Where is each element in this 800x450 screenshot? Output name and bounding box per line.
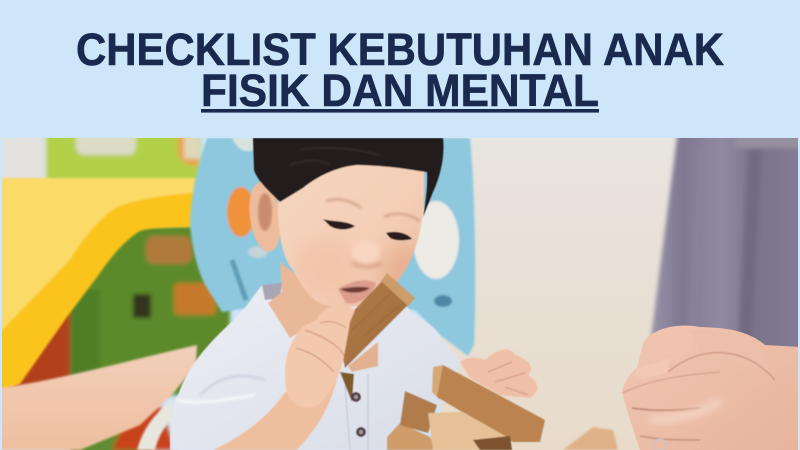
title [76,24,724,116]
neck [268,262,378,372]
ear [248,181,280,252]
right eye [386,232,412,240]
chair edge [137,400,172,450]
mouth [338,280,376,304]
boy left hand [285,305,355,408]
wooden blocks stack [387,365,545,450]
forearm [213,378,337,450]
boy right hand [460,350,537,398]
title underline [201,109,599,113]
left brow [326,200,361,208]
left eye [323,219,355,229]
title line 2: FISIK DAN MENTAL [201,65,599,116]
block: middle left [400,391,437,433]
block: pale centre [428,412,507,450]
hair [253,138,444,217]
block: bottom left [387,423,437,450]
held wooden block [337,273,415,368]
nose [352,241,382,266]
play structure: back wall [0,130,230,450]
blue toy panel [190,138,475,356]
shirt [170,283,460,450]
block: large top end [432,365,443,400]
photo: boy playing with wooden blocks [0,130,800,450]
block: large top [437,365,545,442]
buttons [351,392,366,437]
wall [440,138,678,450]
yellow slide [0,178,196,392]
title line 1: CHECKLIST KEBUTUHAN ANAK [76,24,724,75]
distant wooden block [563,427,618,450]
boy [170,138,545,450]
left adult arm [0,345,197,450]
curtain [650,130,800,352]
face [277,164,425,308]
right adult hands [615,320,800,450]
right brow [384,214,420,221]
